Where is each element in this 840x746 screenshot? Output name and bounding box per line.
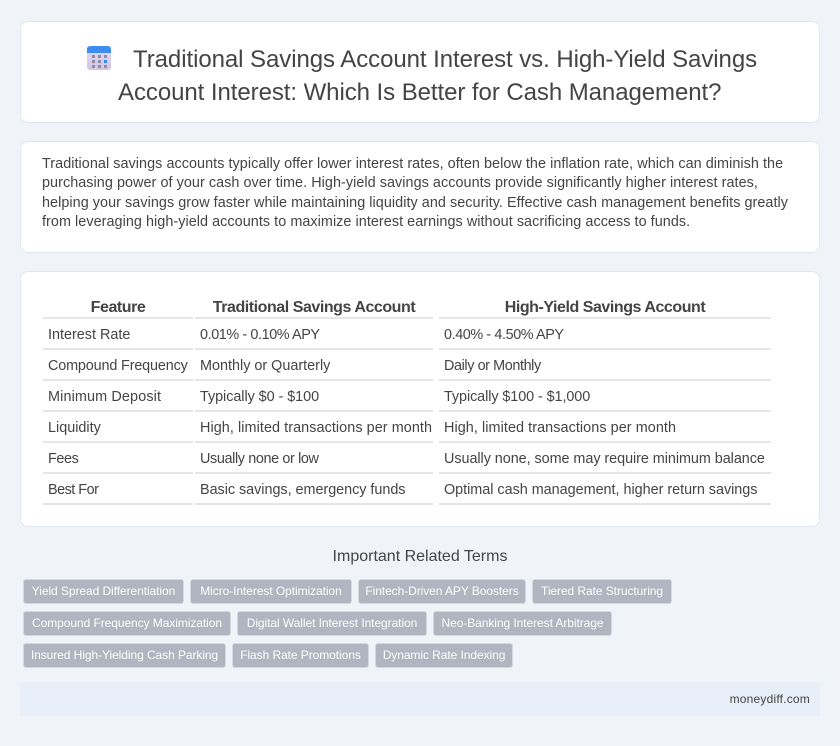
table rows: Minimum Deposit [48,389,161,405]
comparison table [43,299,771,505]
tag [190,579,352,604]
tag: Insured High-Yielding Cash Parking [31,648,218,662]
table rows: Daily or Monthly [444,358,541,374]
table rows: Usually none or low [200,451,319,467]
table rows: Monthly or Quarterly [200,358,330,374]
tag: Flash Rate Promotions [240,648,361,662]
panel: title header [20,21,820,123]
tag: Neo-Banking Interest Arbitrage [442,616,604,630]
table rows: Usually none, some may require minimum balance [444,451,765,467]
table header: High-Yield Savings Account [505,299,705,316]
table header: Traditional Savings Account [213,299,415,316]
title [118,46,757,106]
table header [43,299,771,319]
source label: moneydiff.com [730,692,810,706]
table rows: Liquidity [48,420,101,436]
tag [232,643,369,668]
tag [358,579,526,604]
table rows [43,327,771,505]
tag [433,611,612,636]
table rows: Interest Rate [48,327,130,343]
table rows: Best For [48,482,98,498]
title: Traditional Savings Account Interest vs. High-Yield Savings [133,46,757,73]
tag [532,579,672,604]
tag [23,611,231,636]
related term tags [23,579,672,668]
tag: Fintech-Driven APY Boosters [365,584,519,598]
title: Account Interest: Which Is Better for Cash Management? [118,79,721,106]
intro paragraph: Traditional savings accounts typically offer lower interest rates, often below the inflation rate, which can diminish the [42,156,783,172]
tag [237,611,427,636]
tag: Micro-Interest Optimization [200,584,342,598]
intro paragraph: purchasing power of your cash over time. High-yield savings accounts provide significantly higher interest rates, [42,175,758,191]
table rows: 0.40% - 4.50% APY [444,327,564,343]
tag: Compound Frequency Maximization [32,616,222,630]
table rows: Basic savings, emergency funds [200,482,405,498]
intro paragraph: from leveraging high-yield accounts to maximize interest earnings without sacrificing access to funds. [42,214,690,230]
table rows: Fees [48,451,78,467]
icon: calendar [87,46,111,70]
panel: intro text [20,141,820,253]
heading: related terms: Important Related Terms [333,548,507,565]
tag: Dynamic Rate Indexing [383,648,505,662]
tag [23,643,226,668]
tag: Digital Wallet Interest Integration [247,616,417,630]
table rows: Typically $100 - $1,000 [444,389,590,405]
tag: Tiered Rate Structuring [541,584,663,598]
table rows: Typically $0 - $100 [200,389,319,405]
table rows: Optimal cash management, higher return savings [444,482,757,498]
footer bar [20,682,820,716]
panel: comparison table [20,271,820,527]
table rows: Compound Frequency [48,358,188,374]
table header: Feature [91,299,145,316]
tag [375,643,513,668]
table rows: High, limited transactions per month [200,420,432,436]
intro paragraph: helping your savings grow faster while maintaining liquidity and security. Effective cash management benefits greatly [42,195,788,211]
table rows: 0.01% - 0.10% APY [200,327,320,343]
intro paragraph [42,156,788,230]
table rows: High, limited transactions per month [444,420,676,436]
tag: Yield Spread Differentiation [32,584,175,598]
tag [23,579,184,604]
